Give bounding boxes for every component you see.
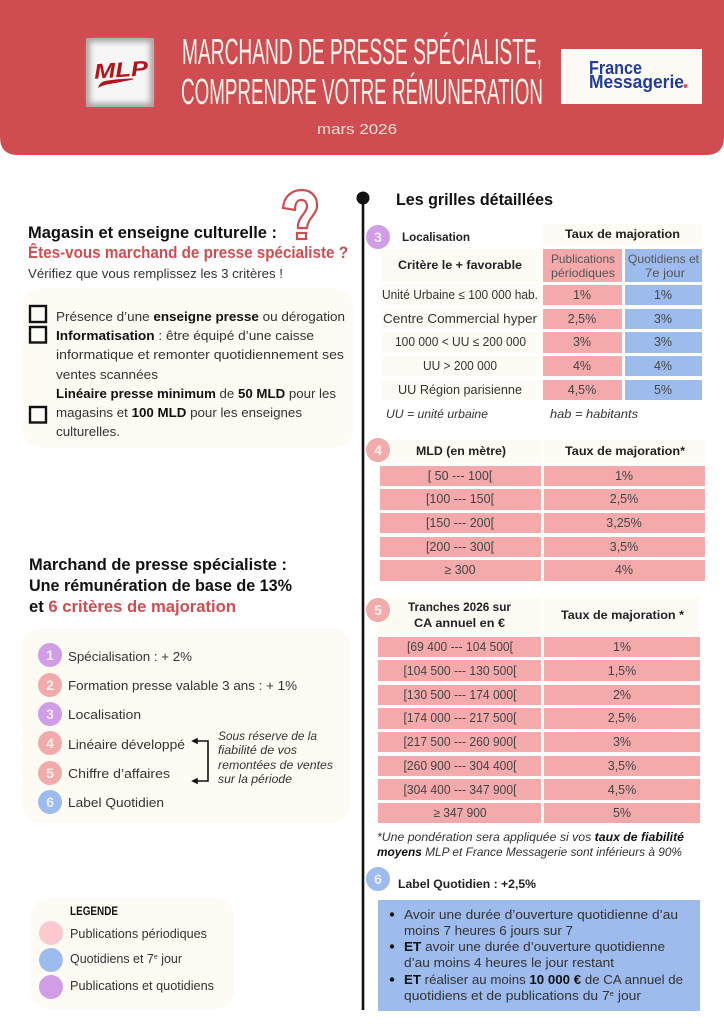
checkbox 1: [30, 306, 46, 322]
row: 3%: [613, 735, 631, 749]
heading: rémunération de base: Une rémunération de base de 13%: [29, 577, 292, 595]
row: [378, 779, 700, 800]
header: MLD (en mètre): [416, 446, 506, 458]
row: [130 500 --- 174 000[: [404, 688, 517, 702]
header: CA annuel en €: [414, 618, 506, 630]
conditions text: ET réaliser au moins 10 000 € de CA annuel de: [404, 973, 683, 987]
title: [181, 31, 543, 112]
header banner: [0, 0, 724, 155]
row: [378, 732, 700, 752]
header: taux de majoration: Taux de majoration: [565, 229, 680, 241]
criterion 2: [38, 673, 297, 697]
row: 1%: [613, 640, 631, 654]
row: 2,5%: [608, 711, 636, 725]
checkbox 2: [30, 327, 46, 342]
criterion 3: Localisation: [68, 708, 141, 722]
conditions text: e: [610, 991, 614, 998]
bullet: [390, 977, 394, 982]
row: [69 400 --- 104 500[: [407, 640, 514, 654]
conditions text: quotidiens et de publications du 7: [404, 989, 590, 1003]
row: [100 --- 150[: [426, 492, 495, 506]
criterion 1: Spécialisation : + 2%: [68, 650, 192, 664]
criterion 6: [38, 790, 164, 814]
criteria text: culturelles.: [56, 425, 120, 439]
row: [304 400 --- 347 900[: [404, 783, 517, 797]
header: publications périodiques: Publications: [551, 252, 615, 266]
abbreviations note: [386, 409, 638, 421]
note: sous réserve: sur la période: [218, 774, 292, 786]
row: [104 500 --- 130 500[: [404, 664, 517, 678]
criteria text: Linéaire presse minimum de 50 MLD pour les: [56, 387, 336, 401]
row: [381, 380, 702, 400]
criterion 5: [38, 761, 170, 785]
badge 6: 6: [374, 871, 382, 887]
row: [380, 513, 705, 533]
row: [378, 685, 700, 705]
row: 3%: [654, 312, 672, 326]
badge 4: 4: [374, 442, 382, 458]
row: [380, 489, 705, 510]
criterion 4: [38, 731, 185, 755]
row: 3%: [573, 335, 591, 349]
criterion 4: 4: [46, 735, 54, 751]
conditions text: ET avoir une durée d’ouverture quotidienne: [404, 940, 665, 954]
badge 5: [366, 598, 390, 622]
label heading: Label Quotidien : +2,5%: [398, 879, 536, 891]
logo: France Messagerie: Messagerie: [589, 72, 684, 92]
footnote: moyens MLP et France Messagerie sont inférieurs à 90%: [377, 847, 682, 859]
criteria text: ventes scannées: [56, 368, 158, 382]
note: sous réserve: remontées de ventes: [218, 760, 333, 772]
row: Centre Commercial hyper: [383, 312, 537, 326]
row: 100 000 < UU ≤ 200 000: [395, 335, 526, 349]
note: sous réserve: [218, 731, 333, 786]
criterion 1: [38, 643, 192, 667]
row: [ 50 --- 100[: [428, 469, 493, 483]
header: quotidiens et 7e jour: 7e jour: [645, 266, 685, 280]
heading: magasin et enseigne culturelle: Vérifiez que vous remplissez les 3 critères !: [28, 267, 283, 281]
panel: 3 critères: [22, 288, 354, 448]
row: [381, 356, 702, 376]
table 3: localisation: [366, 224, 702, 421]
timeline: [356, 192, 370, 1010]
legend item: publications périodiques: Publications périodiques: [70, 927, 207, 941]
row: Unité Urbaine ≤ 100 000 hab.: [382, 288, 538, 302]
row: 2%: [613, 688, 631, 702]
row: [260 900 --- 304 400[: [404, 759, 517, 773]
row: 4%: [654, 359, 672, 373]
row: [378, 637, 700, 657]
row: [174 000 --- 217 500[: [404, 711, 517, 725]
legend item: publications et quotidiens: Publications et quotidiens: [70, 979, 214, 993]
row: [380, 560, 705, 581]
conditions text: jour: [614, 989, 641, 1003]
row: 3,5%: [610, 540, 638, 554]
row: 1%: [615, 469, 633, 483]
heading: les grilles détaillées: Les grilles détaillées: [396, 191, 553, 209]
badge 6: [366, 867, 390, 891]
note: sous réserve: Sous réserve de la: [218, 731, 317, 743]
row: UU Région parisienne: [398, 383, 522, 397]
criterion 5: Chiffre d’affaires: [68, 767, 170, 781]
badge 3: [366, 225, 390, 249]
logo: France Messagerie: France: [589, 58, 642, 78]
legend item: quotidiens: Quotidiens et 7: [70, 952, 154, 966]
bullet: [390, 944, 394, 949]
row: 3,25%: [606, 516, 642, 530]
header: [381, 440, 705, 463]
criterion 2: 2: [46, 677, 54, 693]
row: 2,5%: [568, 312, 596, 326]
row: [381, 309, 702, 329]
header: critère: Critère le + favorable: [398, 260, 522, 272]
criteria text: magasins et 100 MLD pour les enseignes: [56, 406, 302, 420]
table 4: MLD: [366, 438, 705, 581]
badge 3: 3: [374, 229, 382, 245]
row: [150 --- 200[: [426, 516, 495, 530]
criterion 6: 6: [46, 794, 54, 810]
badge 5: 5: [374, 602, 382, 618]
criteria text: [56, 310, 345, 439]
criterion 6: Label Quotidien: [68, 796, 164, 810]
row: 5%: [654, 383, 672, 397]
row: 3,5%: [608, 759, 636, 773]
criterion 1: 1: [46, 647, 54, 663]
logo: France Messagerie: [561, 49, 702, 104]
heading: magasin et enseigne culturelle: Magasin et enseigne culturelle :: [28, 224, 277, 242]
header: Tranches 2026 sur: [408, 602, 512, 614]
row: 4%: [573, 359, 591, 373]
criterion 5: 5: [46, 765, 54, 781]
row: [378, 756, 700, 776]
row: 4,5%: [568, 383, 596, 397]
table 5: chiffre d'affaires: [366, 598, 700, 859]
panel: legend: [30, 898, 235, 1009]
note: sous réserve: fiabilité de vos: [218, 745, 297, 757]
header: publications périodiques: périodiques: [551, 266, 615, 280]
header: Taux de majoration *: [561, 610, 685, 622]
legend item: quotidiens: e: [154, 954, 158, 961]
row: 2,5%: [610, 492, 638, 506]
abbreviations note: hab = habitants: [550, 409, 638, 421]
conditions text: [404, 908, 683, 1003]
criteria text: Informatisation : être équipé d’une caisse: [56, 329, 314, 343]
heading: rémunération de base: Marchand de presse spécialiste :: [29, 556, 287, 574]
row: [380, 537, 705, 557]
bullet: [390, 912, 394, 917]
row: [378, 803, 700, 823]
footnote: *Une pondération sera appliquée si vos taux de fiabilité: [377, 832, 685, 844]
conditions text: Avoir une durée d’ouverture quotidienne d’au: [404, 908, 678, 922]
header: [378, 598, 700, 634]
row: [378, 708, 700, 729]
header: taux de majoration: [543, 224, 702, 245]
row: ≥ 300: [444, 563, 476, 577]
row: [381, 285, 702, 305]
row: 1%: [654, 288, 672, 302]
row: 1%: [573, 288, 591, 302]
arrow: bracket: [193, 739, 208, 783]
icon: question mark: [283, 190, 317, 239]
row: UU > 200 000: [423, 359, 497, 373]
row: 4,5%: [608, 783, 636, 797]
legend item: quotidiens: jour: [158, 952, 182, 966]
date: mars 2026: [317, 121, 397, 138]
legend item: publications périodiques: [39, 921, 207, 945]
criteria text: Présence d’une enseigne presse ou dérogation: [56, 310, 345, 324]
checkbox 3: [30, 407, 46, 422]
header: publications périodiques: [543, 249, 622, 282]
header: Taux de majoration*: [565, 446, 686, 458]
row: [378, 660, 700, 681]
conditions text: d’au moins 4 heures le jour restant: [404, 956, 615, 970]
row: 1,5%: [608, 664, 636, 678]
heading: rémunération de base: [29, 556, 292, 616]
badge 4: [366, 438, 390, 462]
logo: MLP: MLP: [93, 57, 150, 84]
heading: magasin et enseigne culturelle: Êtes-vous marchand de presse spécialiste ?: [28, 243, 348, 262]
row: 4%: [615, 563, 633, 577]
footnote: [377, 832, 685, 859]
row: [381, 332, 702, 353]
header: critère: [381, 249, 541, 282]
heading: rémunération de base: et 6 critères de majoration: [29, 598, 236, 616]
criterion 2: Formation presse valable 3 ans : + 1%: [68, 679, 297, 693]
criterion 3: [38, 702, 141, 726]
row: [380, 466, 705, 486]
criteria text: informatique et remonter quotidiennement ses: [56, 348, 344, 362]
panel: 6 critères de majoration: [22, 628, 351, 823]
label: localisation: Localisation: [402, 232, 470, 244]
row: 3%: [654, 335, 672, 349]
legend item: quotidiens: [39, 948, 182, 972]
header: quotidiens et 7e jour: [625, 249, 702, 282]
header: quotidiens et 7e jour: Quotidiens et: [628, 252, 700, 266]
logo: MLP: [86, 38, 154, 107]
row: [200 --- 300[: [426, 540, 495, 554]
legend title: LEGENDE: [70, 906, 118, 918]
criterion 4: Linéaire développé: [68, 738, 185, 752]
section 6: label quotidien: [366, 867, 700, 1011]
row: ≥ 347 900: [434, 806, 487, 820]
criterion 3: 3: [46, 706, 54, 722]
panel: conditions: [378, 900, 700, 1011]
legend item: publications et quotidiens: [39, 975, 214, 999]
row: [217 500 --- 260 900[: [404, 735, 517, 749]
conditions text: moins 7 heures 6 jours sur 7: [404, 924, 573, 938]
heading: magasin et enseigne culturelle: [28, 224, 348, 281]
abbreviations note: UU = unité urbaine: [386, 409, 488, 421]
row: 5%: [613, 806, 631, 820]
